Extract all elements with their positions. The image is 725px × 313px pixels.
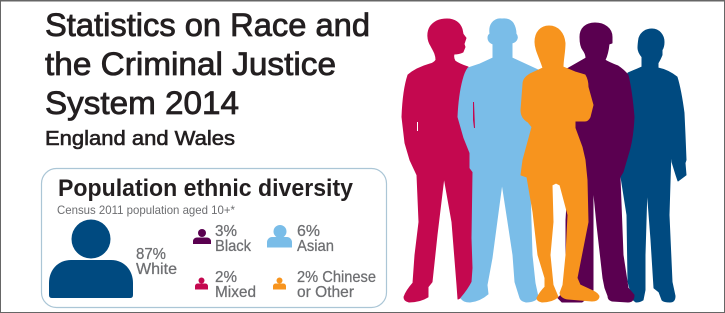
title xyxy=(45,7,370,121)
silhouettes of five people xyxy=(402,19,686,302)
title: Statistics on Race and xyxy=(45,7,370,43)
figure: purple silhouette xyxy=(558,23,634,302)
panel: population ethnic diversity xyxy=(42,168,386,308)
title: System 2014 xyxy=(45,85,239,121)
figure: crimson silhouette xyxy=(402,19,480,302)
icon: large person, White xyxy=(49,220,133,298)
icon: small person, Mixed xyxy=(195,278,208,290)
label: 87% White xyxy=(136,246,177,278)
figure: navy silhouette xyxy=(610,29,686,302)
figure: light blue silhouette xyxy=(458,19,545,302)
label: 2% Mixed xyxy=(215,269,256,301)
label: 2% Chinese or Other: or Other xyxy=(297,284,355,301)
panel heading: Population ethnic diversity xyxy=(58,175,354,202)
figure: orange silhouette xyxy=(521,26,599,302)
subtitle: England and Wales: England and Wales xyxy=(45,128,235,150)
label: 2% Mixed: Mixed xyxy=(215,284,256,301)
slit in crimson figure xyxy=(417,122,418,131)
label: 87% White: 87% xyxy=(136,246,166,263)
label: 6% Asian xyxy=(297,223,334,255)
title: the Criminal Justice xyxy=(45,46,336,82)
label: 87% White: White xyxy=(136,261,177,278)
label: 3% Black xyxy=(215,223,252,255)
label: 2% Mixed: 2% xyxy=(215,269,237,286)
icon: small person, Black xyxy=(193,229,211,244)
label: 6% Asian: Asian xyxy=(297,238,334,255)
panel subheading: Census 2011 population aged 10+* xyxy=(57,203,235,217)
icon: small person, Chinese or Other xyxy=(273,278,286,290)
label: 3% Black: Black xyxy=(215,238,252,255)
label: 3% Black: 3% xyxy=(215,223,237,240)
label: 2% Chinese or Other xyxy=(297,269,376,301)
slit in light blue figure xyxy=(473,102,475,128)
icon: person, Asian xyxy=(267,225,292,248)
label: 6% Asian: 6% xyxy=(297,223,320,240)
label: 2% Chinese or Other: 2% Chinese xyxy=(297,269,376,286)
